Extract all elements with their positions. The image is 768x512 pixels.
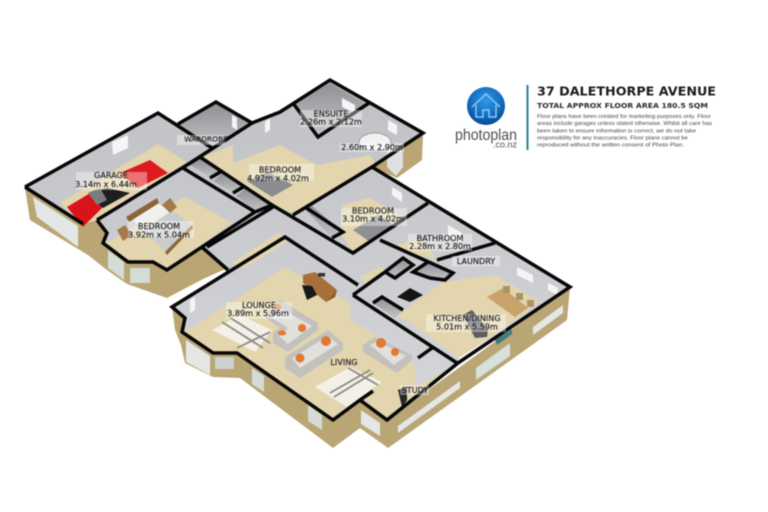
wall top outlines [25, 80, 570, 420]
room labels: 3.89m x 5.96m [227, 308, 289, 318]
room labels: LOUNGE [242, 300, 276, 310]
room labels: KITCHEN/DINING [433, 313, 501, 323]
furniture: lounge sofas [265, 300, 412, 378]
furniture: desk and chair [302, 272, 337, 302]
divider line [526, 85, 528, 150]
furniture: beds, bath and rugs [117, 133, 397, 407]
room labels: BATHROOM [417, 233, 463, 243]
room labels: GARAGE [94, 170, 128, 180]
room labels: 3.14m x 6.44m [75, 179, 137, 189]
room labels: LIVING [330, 357, 358, 367]
room labels: 2.60m x 2.90m [341, 142, 403, 152]
disclaimer text [537, 114, 712, 148]
room labels: 2.28m x 2.80m [409, 241, 471, 251]
wall windows [112, 98, 558, 313]
disclaimer text: Floor plans have been created for marketing purposes only. Floor [537, 114, 711, 120]
disclaimer text: been taken to ensure information is correct, we do not take [537, 128, 696, 134]
floor plan: 3D house model [25, 80, 570, 448]
subtitle: floor area: TOTAL APPROX FLOOR AREA 180.5 SQM [537, 101, 708, 110]
interior wall base [25, 80, 570, 420]
logo wordmark: photoplan [455, 127, 517, 144]
room labels: WARDROBE [184, 134, 228, 144]
room labels: 3.92m x 5.04m [128, 230, 190, 240]
logo wordmark: .co.nz [493, 140, 517, 150]
furniture: red car in garage [67, 160, 168, 227]
closets and shaded alcoves [178, 83, 453, 318]
room labels: 5.01m x 5.59m [436, 322, 498, 332]
icon: blue circle with house [467, 87, 505, 125]
room labels: LAUNDRY [457, 256, 495, 266]
room labels: BEDROOM [259, 164, 301, 174]
disclaimer text: responsibility for any inaccuracies. Floor plans cannot be [537, 136, 688, 142]
room labels: BEDROOM [352, 206, 394, 216]
logo: photoplan [455, 87, 517, 150]
room labels: 3.10m x 4.02m [342, 214, 404, 224]
disclaimer text: areas include garages unless stated otherwise. Whilst all care has [537, 121, 712, 127]
room labels: 4.92m x 4.02m [247, 173, 309, 183]
exterior brick walls [25, 133, 570, 448]
exterior windows and doors [33, 197, 563, 436]
room labels: BEDROOM [138, 221, 180, 231]
room labels: STUDY [402, 385, 428, 395]
title: 37 DALETHORPE AVENUE [537, 84, 716, 98]
room floors [60, 144, 540, 418]
room labels: 2.26m x 2.12m [300, 116, 362, 126]
furniture: dining table, kitchen island and hob [397, 286, 534, 407]
room labels: ENSUITE [314, 108, 348, 118]
room labels [75, 108, 506, 395]
disclaimer text: reproduced without the written consent of Photo Plan. [537, 142, 684, 148]
